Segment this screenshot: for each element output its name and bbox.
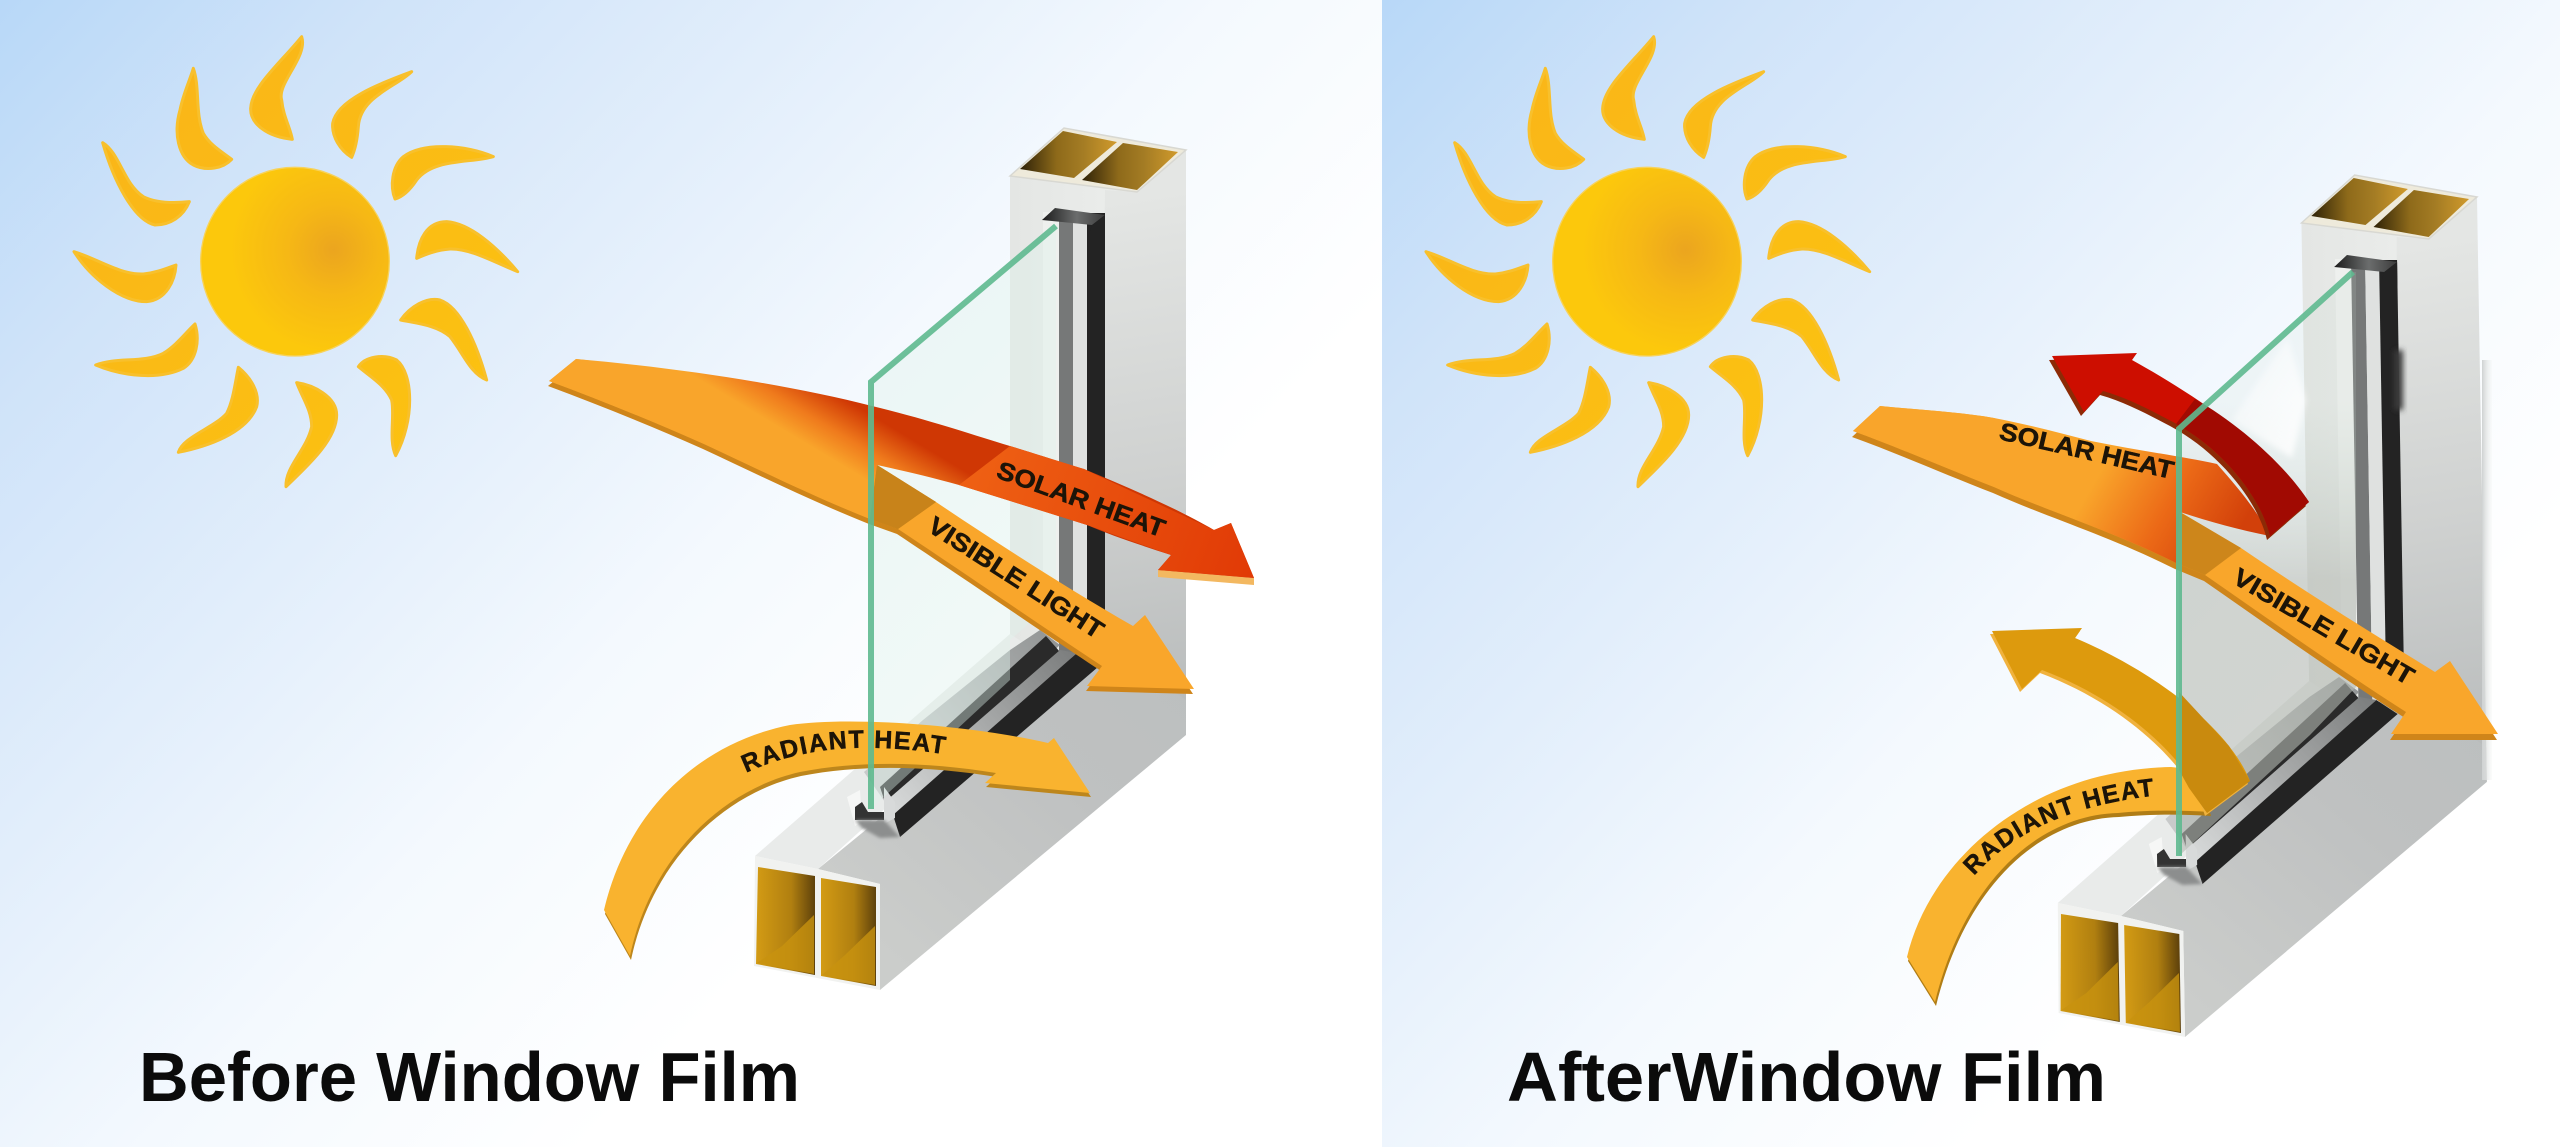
glass pane with film (after) — [2179, 272, 2356, 856]
panel: before window film — [0, 0, 1344, 1147]
film edge smudge on frame — [2394, 350, 2492, 780]
arrow: radiant heat (after) — [1907, 767, 2211, 1006]
title: before window film: Before Window Film — [139, 1038, 800, 1116]
glass edge (after) — [2179, 272, 2353, 856]
icon: sun (before) — [74, 37, 518, 487]
icon: sun (after) — [1426, 37, 1870, 487]
label: visible light (after): VISIBLE LIGHT — [2228, 563, 2419, 691]
panel background: before — [0, 0, 1382, 1147]
glass edge (before) — [871, 226, 1056, 809]
panel: after window film — [1382, 0, 2560, 1147]
label: radiant heat (after): RADIANT HEAT — [1962, 778, 2153, 875]
arrow: radiant heat reflected (after) — [1990, 628, 2250, 816]
window film fold — [2232, 338, 2306, 458]
label: solar heat (after): SOLAR HEAT — [1997, 418, 2176, 485]
label: solar heat (before): SOLAR HEAT — [993, 456, 1169, 543]
glass pane (before) — [871, 226, 1056, 809]
panel background: after — [1382, 0, 2560, 1147]
arrow: radiant heat (before) — [604, 721, 1091, 960]
window frame (after) — [2045, 175, 2491, 1037]
arrow: solar heat (after) — [1853, 406, 2270, 563]
arrow: visible light (before) — [548, 359, 1194, 694]
arrow: solar heat (before) — [549, 359, 1254, 585]
title: after window film: AfterWindow Film — [1507, 1038, 2106, 1116]
window frame (before) — [754, 128, 1186, 990]
arrow: solar heat reflected (after) — [2049, 353, 2309, 540]
label: radiant heat (before): RADIANT HEAT — [740, 730, 947, 772]
label: visible light (before): VISIBLE LIGHT — [923, 511, 1109, 645]
arrow: visible light (after) — [1852, 406, 2498, 740]
